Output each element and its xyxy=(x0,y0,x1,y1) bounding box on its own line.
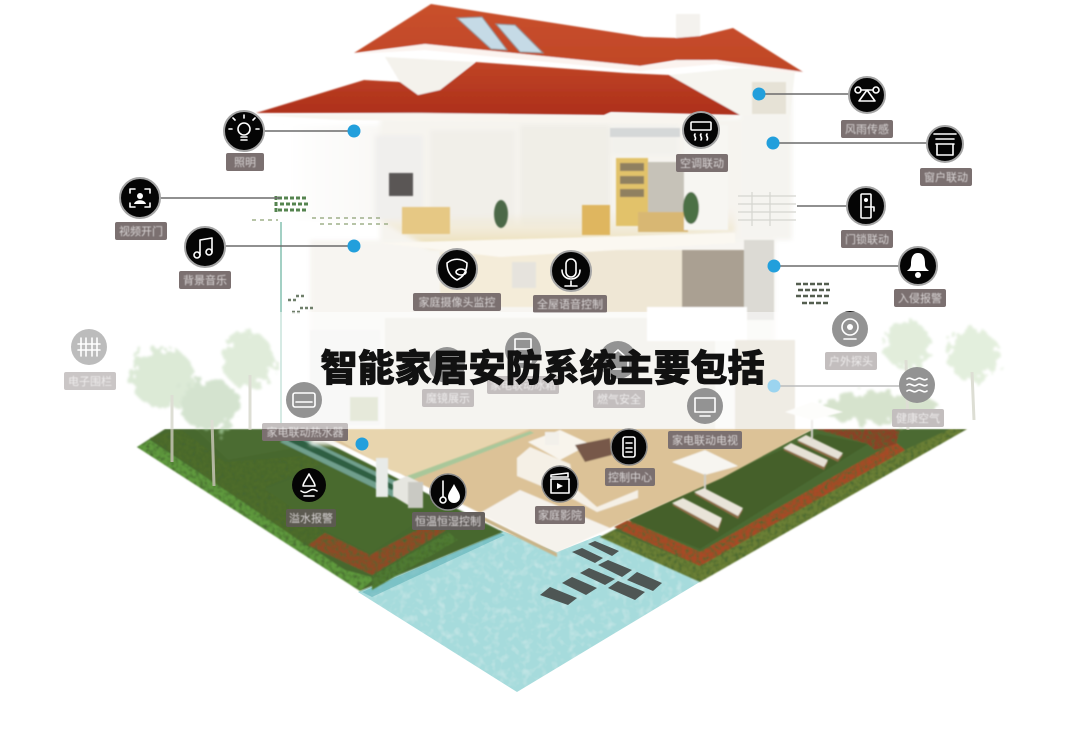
icon: home camera monitoring: 家庭摄像头监控 xyxy=(418,295,496,309)
icon: door lock xyxy=(841,187,893,248)
roof xyxy=(256,4,803,124)
icon: healthy air xyxy=(892,367,944,427)
translucent title band xyxy=(0,312,1080,429)
icon: home camera monitoring xyxy=(413,249,501,311)
icon: fridge: 家电联动冰箱 xyxy=(490,378,556,392)
icon: temperature and humidity xyxy=(412,474,485,530)
icon: electronic fence xyxy=(64,329,116,390)
icon: window control: 窗户联动 xyxy=(924,170,968,184)
icon: water overflow alarm: 溢水报警 xyxy=(289,511,333,525)
title: 智能家居安防系统主要包括 xyxy=(320,348,764,389)
red flower strip xyxy=(308,522,446,575)
upper gable walls xyxy=(385,57,475,95)
ground: right lawn and flower border xyxy=(600,429,967,582)
icon: wind and rain sensor xyxy=(841,77,893,138)
grass xyxy=(265,465,420,553)
icon: gas safety xyxy=(593,341,645,408)
icon: window control xyxy=(920,126,972,186)
ground floor: living room xyxy=(310,402,843,557)
icon: wind and rain sensor: 风雨传感 xyxy=(845,123,889,136)
icon: intrusion alarm bell: 入侵报警 xyxy=(898,291,942,305)
connector lines xyxy=(140,94,945,386)
trees xyxy=(131,321,999,431)
pool xyxy=(358,530,703,692)
icon: control centre: 控制中心 xyxy=(608,470,652,484)
stepping stones xyxy=(540,541,662,605)
icon: healthy air: 健康空气 xyxy=(896,411,940,425)
red inner strip xyxy=(614,442,905,566)
dark shrub band xyxy=(150,429,330,548)
icon: electronic fence: 电子围栏 xyxy=(68,374,112,388)
icon: air conditioner: 空调联动 xyxy=(680,156,724,170)
icon: background music xyxy=(179,227,231,289)
icon: TV xyxy=(668,388,742,449)
parasol xyxy=(672,450,738,475)
icon: magic mirror: 魔镜展示 xyxy=(426,391,470,405)
icon: background music: 背景音乐 xyxy=(183,273,227,287)
icon: control centre xyxy=(605,429,655,486)
yellow-green outer hedge xyxy=(600,429,967,582)
icon: intrusion alarm bell xyxy=(894,247,946,307)
icon: voice control xyxy=(533,251,607,313)
icon: video door xyxy=(115,178,167,240)
house body xyxy=(288,95,792,445)
sofa xyxy=(517,447,638,512)
lower roof xyxy=(256,62,740,115)
icon: lighting: 照明 xyxy=(234,156,256,169)
icon: magic mirror xyxy=(422,347,474,407)
icon: voice control: 全屋语音控制 xyxy=(537,297,603,311)
skylights xyxy=(457,17,543,53)
chimney xyxy=(676,14,700,61)
icon: air conditioner xyxy=(676,112,728,172)
upper roof xyxy=(354,4,803,72)
blue sensor dots xyxy=(348,88,780,450)
balcony plants xyxy=(252,192,830,312)
icon: home theatre xyxy=(535,466,585,524)
ground: left lawn and hedges xyxy=(137,429,503,591)
icon: temperature and humidity: 恒温恒湿控制 xyxy=(415,514,481,528)
icon: home theatre: 家庭影院 xyxy=(538,508,582,522)
icon: water heater xyxy=(262,382,348,441)
green glass wall edge xyxy=(280,222,282,430)
icon: water heater: 家电联动热水器 xyxy=(266,425,344,439)
teal glass base stripes xyxy=(280,434,408,497)
icon: video door: 视频开门 xyxy=(119,224,163,238)
icon: TV: 家电联动电视 xyxy=(672,433,738,447)
outer bright hedge xyxy=(137,440,375,591)
icon: outdoor camera: 户外探头 xyxy=(829,354,873,368)
icon: door lock: 门锁联动 xyxy=(845,232,889,246)
icon: fridge xyxy=(487,332,559,394)
icon: outdoor camera xyxy=(825,311,877,370)
fascia xyxy=(354,44,803,73)
loungers xyxy=(672,500,722,532)
icon: lighting xyxy=(224,111,264,171)
icon: gas safety: 燃气安全 xyxy=(597,392,641,406)
icon: water overflow alarm xyxy=(286,468,336,527)
